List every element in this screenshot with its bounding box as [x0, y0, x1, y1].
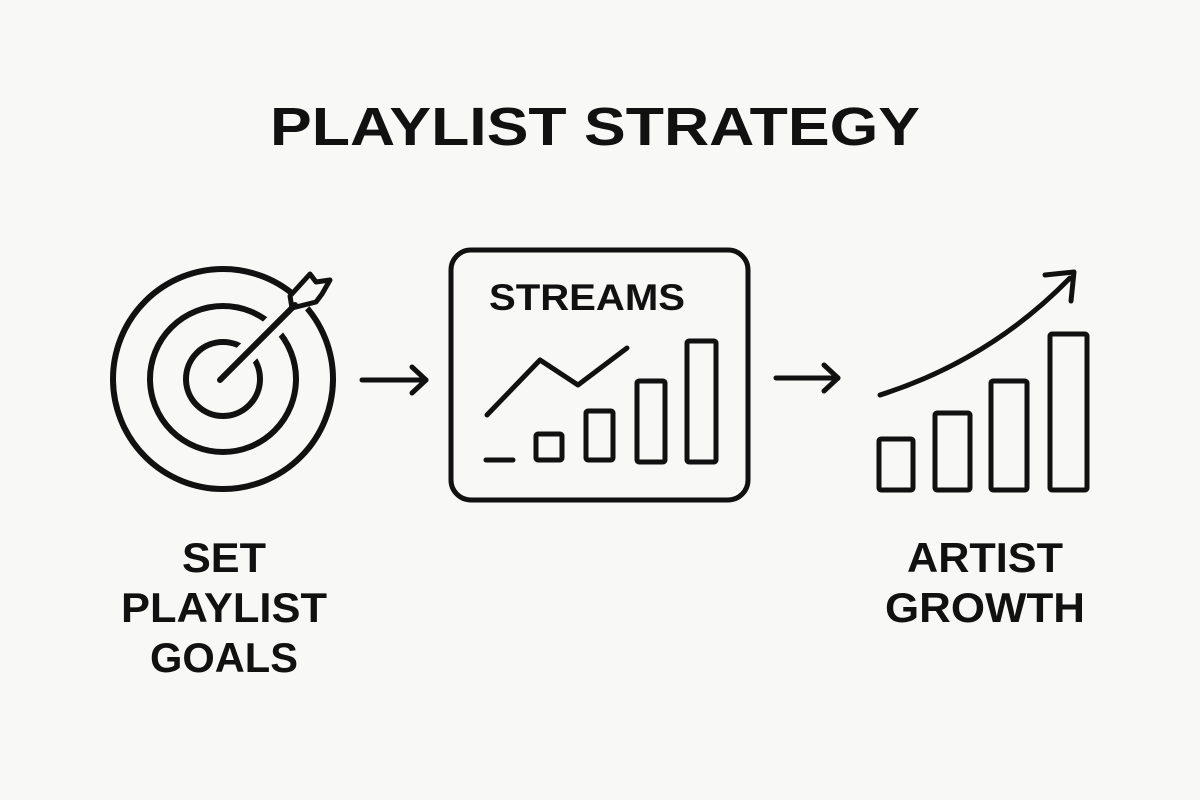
- label: set playlist goals: PLAYLIST: [121, 584, 327, 631]
- label: artist growth: [885, 534, 1085, 631]
- title: PLAYLIST STRATEGY: [270, 97, 920, 157]
- chart: artist growth: [879, 272, 1087, 490]
- label: set playlist goals: GOALS: [150, 634, 298, 681]
- label: artist growth: ARTIST: [907, 534, 1063, 581]
- label: artist growth: GROWTH: [885, 584, 1085, 631]
- arrow 2: [776, 365, 838, 391]
- panel: streams chart: [451, 250, 748, 500]
- arrow 1: [362, 367, 426, 393]
- label: set playlist goals: SET: [182, 534, 266, 581]
- panel: streams chart: STREAMS: [489, 277, 685, 318]
- label: set playlist goals: [121, 534, 327, 681]
- icon: target with arrow: [113, 269, 333, 489]
